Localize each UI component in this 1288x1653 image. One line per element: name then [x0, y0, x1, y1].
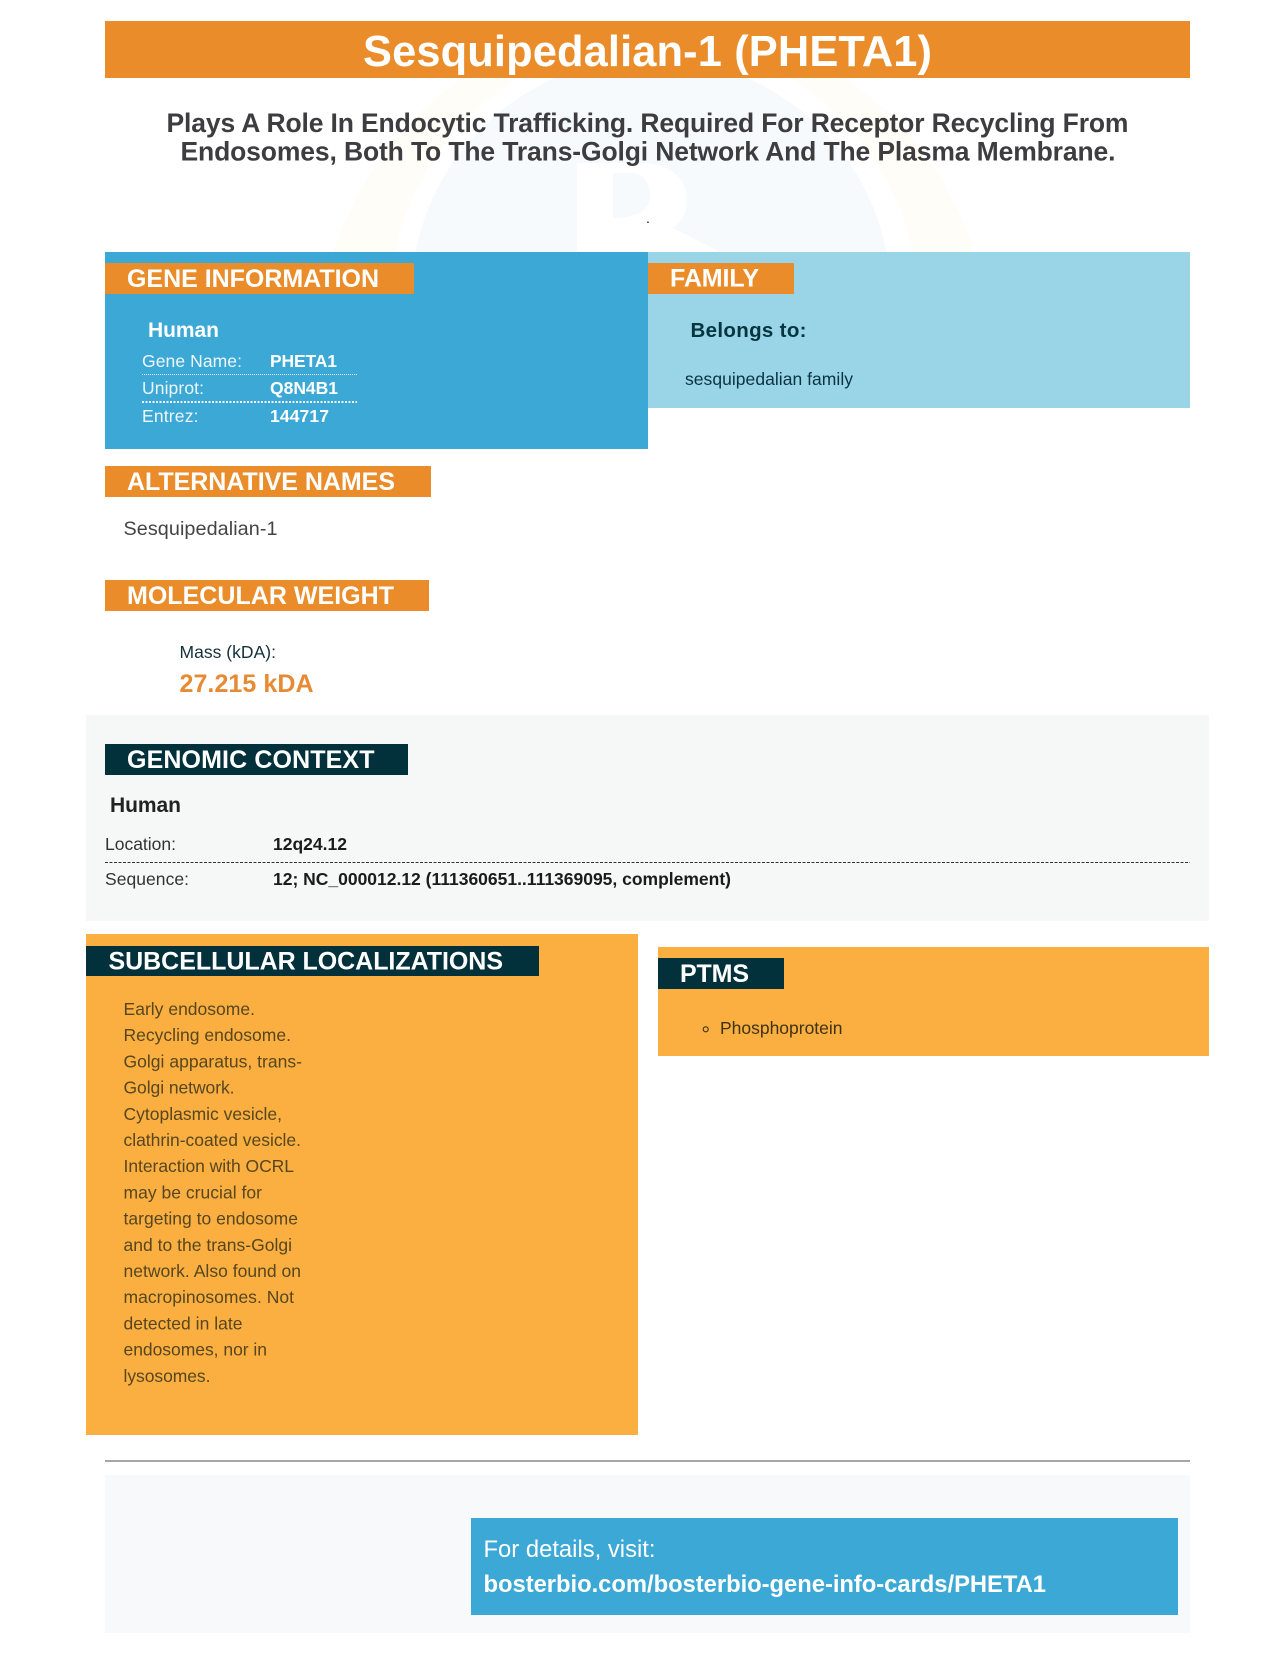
localization text — [124, 999, 302, 1386]
panel: subcellular localizations — [86, 934, 638, 1435]
localization text: Interaction with OCRL — [124, 1156, 294, 1176]
alternative name value: Sesquipedalian-1 — [124, 518, 278, 540]
sequence row: 12; NC_000012.12 (111360651..111369095, complement) — [273, 869, 731, 889]
heading: genomic context: GENOMIC CONTEXT — [127, 746, 374, 774]
small dot: . — [646, 210, 650, 226]
background watermark logo — [416, 78, 886, 252]
location row — [105, 834, 347, 854]
panel: family — [648, 252, 1190, 408]
gene identifiers table: PHETA1 — [270, 351, 337, 371]
localization text: Early endosome. — [124, 999, 255, 1019]
subtitle description: Endosomes, Both To The Trans-Golgi Network And The Plasma Membrane. — [180, 136, 1116, 166]
localization text: lysosomes. — [124, 1366, 210, 1386]
heading: ptms — [658, 958, 784, 989]
localization text: macropinosomes. Not — [124, 1287, 294, 1307]
localization text: may be crucial for — [124, 1182, 262, 1202]
localization text: Golgi network. — [124, 1078, 234, 1098]
gene identifiers table: Gene Name: — [142, 351, 242, 371]
gene identifiers table: Uniprot: — [142, 378, 204, 398]
location row: Location: — [105, 834, 176, 854]
localization text: Cytoplasmic vesicle, — [124, 1104, 282, 1124]
panel: genomic context — [86, 715, 1209, 921]
localization text: network. Also found on — [124, 1261, 301, 1281]
heading: family: FAMILY — [670, 264, 759, 292]
footer panel — [105, 1475, 1190, 1633]
location row: 12q24.12 — [273, 834, 347, 854]
mass value: 27.215 kDA — [180, 670, 314, 698]
heading: gene information: GENE INFORMATION — [127, 265, 379, 293]
section: molecular weight — [105, 580, 429, 698]
gene identifiers table: Entrez: — [142, 406, 198, 426]
localization text: Recycling endosome. — [124, 1025, 291, 1045]
subtitle description: Plays A Role In Endocytic Trafficking. Required For Receptor Recycling From — [166, 108, 1128, 138]
panel: gene information — [105, 252, 648, 449]
localization text: Golgi apparatus, trans- — [124, 1051, 302, 1071]
title banner — [105, 21, 1190, 78]
panel: ptms — [658, 947, 1209, 1056]
heading: molecular weight: MOLECULAR WEIGHT — [127, 582, 394, 610]
details callout: For details, visit: — [484, 1536, 656, 1563]
ptm list item: Phosphoprotein — [720, 1018, 842, 1038]
details callout: bosterbio.com/bosterbio-gene-info-cards/PHETA1 — [484, 1571, 1046, 1598]
gene identifiers table — [142, 351, 357, 426]
gene identifiers table: Q8N4B1 — [270, 378, 338, 398]
title banner: Sesquipedalian-1 (PHETA1) — [363, 28, 932, 76]
species label: human: Human — [110, 794, 181, 817]
gene identifiers table: 144717 — [270, 406, 329, 426]
heading: subcellular localizations: SUBCELLULAR LOCALIZATIONS — [108, 948, 503, 976]
details callout — [471, 1518, 1178, 1615]
family name: sesquipedalian family — [685, 369, 853, 389]
localization text: targeting to endosome — [124, 1209, 298, 1229]
heading: ptms: PTMS — [680, 960, 749, 988]
localization text: clathrin-coated vesicle. — [124, 1130, 301, 1150]
sequence row: Sequence: — [105, 869, 189, 889]
section: alternative names — [105, 466, 431, 540]
mass label: Mass (kDA): — [180, 642, 276, 662]
species label: human: Human — [148, 319, 219, 342]
localization text: endosomes, nor in — [124, 1340, 267, 1360]
belongs to label: Belongs to: — [690, 319, 806, 342]
localization text: and to the trans-Golgi — [124, 1235, 292, 1255]
subtitle description — [166, 108, 1128, 166]
heading: alternative names: ALTERNATIVE NAMES — [127, 468, 395, 496]
localization text: detected in late — [124, 1313, 242, 1333]
heading: family — [648, 263, 794, 294]
